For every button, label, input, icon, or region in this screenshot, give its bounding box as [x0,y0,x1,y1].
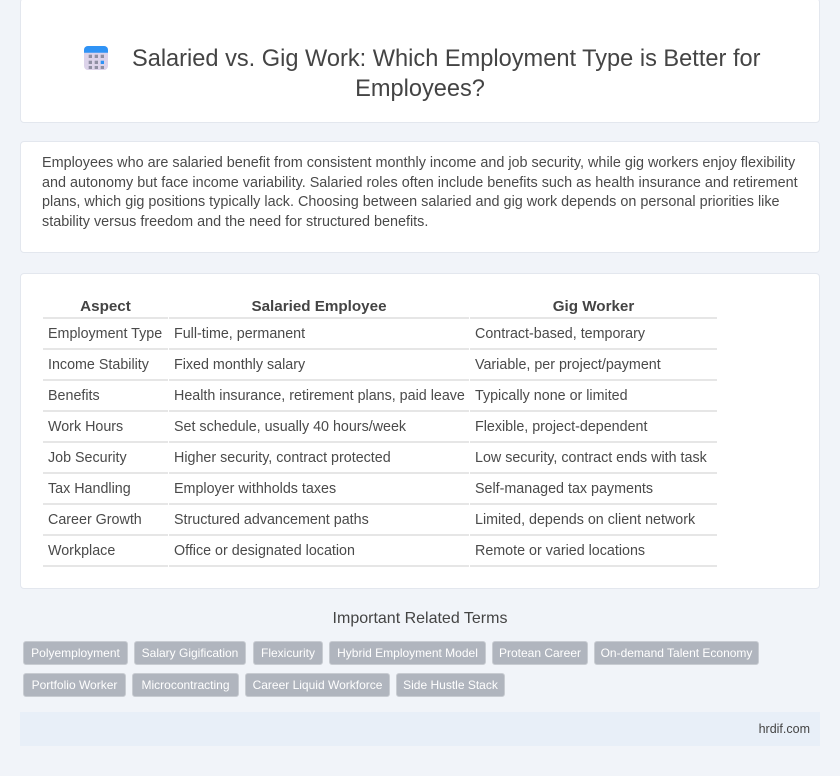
related term chips: Hybrid Employment Model [337,646,478,660]
row: job security: Higher security, contract protected [174,450,391,466]
intro paragraph [42,155,798,230]
row: tax handling: Self-managed tax payments [475,481,653,497]
related term chips: Microcontracting [141,678,230,692]
row: career growth [48,512,696,528]
panel: introduction text [20,141,820,253]
row: career growth: Limited, depends on client network [475,512,695,528]
related term chips: Side Hustle Stack [403,678,498,692]
intro paragraph: stability versus freedom and the need for structured benefits. [42,214,428,230]
related term chips: On-demand Talent Economy [601,646,752,660]
related term chips: Protean Career [499,646,581,660]
intro paragraph: and autonomy but face income variability. Salaried roles often include benefits such as health insurance and retirement [42,174,798,190]
title [132,46,760,102]
source credit: hrdif.com [759,722,810,736]
related term chips: Career Liquid Workforce [253,678,382,692]
row: workplace: Remote or varied locations [475,543,645,559]
row: work hours: Set schedule, usually 40 hours/week [174,419,406,435]
row: employment type: Full-time, permanent [174,326,305,342]
title: Salaried vs. Gig Work: Which Employment Type is Better for [132,46,760,72]
row: tax handling [48,481,653,497]
row: benefits: Benefits [48,388,100,404]
row: tax handling: Tax Handling [48,481,131,497]
row: employment type: Employment Type [48,326,162,342]
related term chips [23,641,759,697]
heading: important related terms: Important Related Terms [333,610,507,627]
row: income stability [48,357,661,373]
row: benefits: Typically none or limited [475,388,628,404]
row: work hours: Flexible, project-dependent [475,419,647,435]
icon: calendar [84,46,108,70]
related term chips: Polyemployment [31,646,120,660]
row: tax handling: Employer withholds taxes [174,481,336,497]
related term chips: Flexicurity [261,646,315,660]
panel: title header [20,0,820,123]
table header: Salaried Employee [251,298,387,315]
row: employment type [48,326,645,342]
row: income stability: Income Stability [48,357,149,373]
related term chips: Portfolio Worker [32,678,117,692]
row: job security: Low security, contract ends with task [475,450,707,466]
row: job security: Job Security [48,450,127,466]
row: workplace: Office or designated location [174,543,355,559]
row: workplace [48,543,645,559]
row: workplace: Workplace [48,543,115,559]
table header: Gig Worker [553,298,634,315]
table header: Aspect [80,298,131,315]
row: work hours: Work Hours [48,419,123,435]
panel: comparison table [20,273,820,589]
related term chips: Salary Gigification [142,646,238,660]
row: career growth: Career Growth [48,512,142,528]
row: benefits: Health insurance, retirement plans, paid leave [174,388,465,404]
row: career growth: Structured advancement paths [174,512,369,528]
row: employment type: Contract-based, temporary [475,326,645,342]
row: income stability: Variable, per project/payment [475,357,661,373]
title: Employees? [355,76,485,102]
row: income stability: Fixed monthly salary [174,357,305,373]
table header [80,298,634,315]
intro paragraph: Employees who are salaried benefit from consistent monthly income and job security, while gig workers enjoy flexibility [42,155,795,171]
row: benefits [48,388,628,404]
row: work hours [48,419,648,435]
footer bar [20,712,820,746]
intro paragraph: plans, which gig positions typically lack. Choosing between salaried and gig work depends on personal priorities like [42,194,780,210]
row: job security [48,450,707,466]
